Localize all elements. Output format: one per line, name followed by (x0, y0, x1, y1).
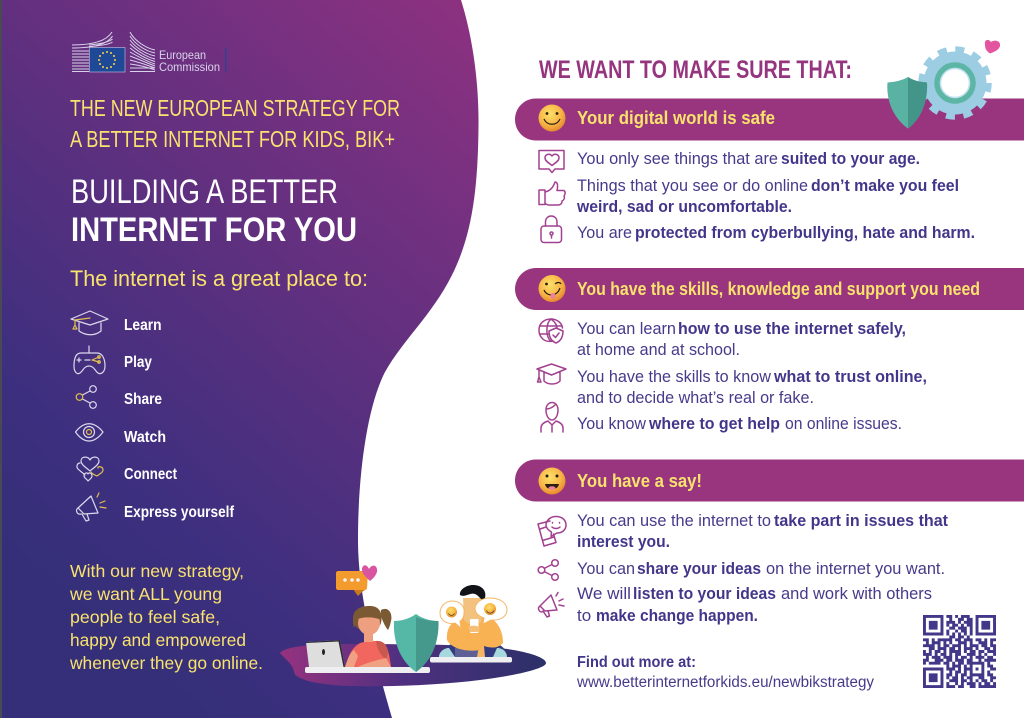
text: share your ideas: share your ideas (637, 559, 761, 578)
text: where to get help (577, 414, 902, 433)
label: share: Share (124, 391, 162, 408)
text: dont make you feel: don’t make you feel (811, 176, 959, 195)
text: where to get help: where to get help (648, 414, 780, 433)
text: share your ideas: You can (577, 559, 635, 578)
list: things to do online (71, 311, 235, 521)
icon: thumbs up (539, 182, 565, 205)
label: learn: Learn (124, 317, 162, 334)
text: share your ideas (577, 559, 945, 578)
text: what to trust online (577, 367, 927, 407)
section heading: Your digital world is safe (577, 108, 775, 128)
text: listen to your ideas: and work with others (781, 584, 932, 603)
text: suited to your age (577, 149, 920, 168)
section heading: You have a say! (577, 471, 702, 491)
panel: left gradient background (0, 0, 479, 718)
section bar (515, 268, 1024, 310)
heading: building a better internet: BUILDING A BETTER (71, 173, 338, 211)
panel: skills, knowledge and support (515, 268, 1024, 433)
label: watch: Watch (124, 429, 166, 446)
text: what to trust online: what to trust online, (773, 367, 927, 386)
icon: tongue smile (538, 468, 566, 494)
icon: speech bubble wink (475, 598, 507, 624)
text: listen to your ideas: to (577, 606, 591, 625)
icon: globe with shield (539, 319, 563, 343)
icon: eye (76, 424, 103, 441)
icon: graduation cap (537, 364, 566, 384)
text block: find out more (576, 654, 874, 691)
label: express yourself: Express yourself (124, 504, 235, 521)
text: dont make you feel (576, 176, 959, 216)
girl with laptop (305, 606, 430, 673)
logo: European Commission: European (159, 48, 206, 62)
icon: wink (538, 275, 566, 302)
section bar (515, 98, 1024, 140)
text: dont make you feel: Things that you see or do online (577, 176, 808, 195)
text: take part in issues: interest you. (577, 532, 670, 551)
text: suited to your age: suited to your age. (781, 149, 920, 168)
text: share your ideas: on the internet you want. (766, 559, 945, 578)
section heading: You have the skills, knowledge and support you need (577, 279, 980, 299)
label: play: Play (124, 354, 152, 371)
text: how to use the internet safely: at home and at school. (577, 340, 740, 359)
heading: strategy title (70, 95, 400, 152)
panel: your digital world is safe (515, 40, 1024, 243)
text: listen to your ideas: We will (577, 584, 631, 603)
text block: find out more: www.betterinternetforkids.eu/newbikstrategy (576, 674, 874, 691)
section bar (515, 460, 1024, 502)
text: protected from cyberbullying: You are (577, 223, 632, 242)
icon: phone and chat (538, 516, 566, 546)
subheading: great place: The internet is a great place to: (70, 266, 368, 291)
icon: chat bubble (336, 565, 377, 596)
panel: you have a say (515, 460, 1024, 625)
text block: new strategy: people to feel safe, (70, 607, 220, 627)
icon: speech bubble smile (440, 601, 464, 628)
icon: helper person (541, 402, 563, 432)
text: what to trust online: You have the skills to know (577, 367, 772, 386)
text: where to get help: on online issues. (785, 414, 902, 433)
icon: padlock (541, 216, 562, 242)
icon: share (538, 560, 558, 580)
icon: smile (538, 104, 566, 132)
icon: megaphone (539, 592, 564, 617)
logo: European Commission: Commission (159, 60, 220, 74)
text: where to get help: You know (577, 414, 647, 433)
text: suited to your age: You only see things that are (577, 149, 778, 168)
qr code (923, 615, 996, 688)
text: protected from cyberbullying: protected from cyberbullying, hate and harm. (635, 223, 975, 242)
icon: heart speech box (539, 150, 564, 172)
text block: new strategy: whenever they go online. (69, 653, 263, 673)
text: dont make you feel: weird, sad or uncomfortable. (576, 197, 792, 216)
icon: shield (394, 614, 439, 672)
illustration: kids online (280, 565, 546, 686)
heading: building a better internet (71, 173, 357, 249)
icon: megaphone (77, 493, 106, 521)
text block: new strategy: With our new strategy, (70, 561, 244, 581)
text: take part in issues (577, 511, 948, 551)
text block: find out more: Find out more at: (577, 654, 696, 671)
text: listen to your ideas: listen to your ideas (633, 584, 776, 603)
heading: building a better internet: INTERNET FOR YOU (71, 211, 357, 249)
boy with phone (430, 585, 512, 662)
text: how to use the internet safely: how to use the internet safely, (678, 319, 906, 338)
heading: strategy title: THE NEW EUROPEAN STRATEGY FOR (70, 95, 400, 121)
text: take part in issues: You can use the internet to (577, 511, 771, 530)
text block: new strategy (69, 561, 263, 673)
logo: European Commission (72, 32, 226, 74)
icon: graduation cap (71, 311, 108, 335)
icon: game controller (74, 346, 105, 374)
label: connect: Connect (124, 466, 178, 483)
heading: strategy title: A BETTER INTERNET FOR KIDS, BIK+ (70, 126, 395, 152)
floor blob (280, 644, 546, 686)
text block: new strategy: we want ALL young (69, 584, 222, 604)
text: how to use the internet safely (577, 319, 906, 359)
icon: hearts (77, 457, 103, 481)
heading: we want to make sure that: WE WANT TO MAKE SURE THAT: (539, 56, 852, 84)
text: listen to your ideas (577, 584, 932, 625)
text: what to trust online: and to decide what’s real or fake. (577, 388, 814, 407)
text: take part in issues: take part in issues that (774, 511, 948, 530)
text: listen to your ideas: make change happen. (596, 606, 758, 625)
text block: new strategy: happy and empowered (70, 630, 246, 650)
icon: gear and shield (887, 40, 1000, 128)
icon: share (76, 386, 96, 408)
text: how to use the internet safely: You can learn (577, 319, 676, 338)
